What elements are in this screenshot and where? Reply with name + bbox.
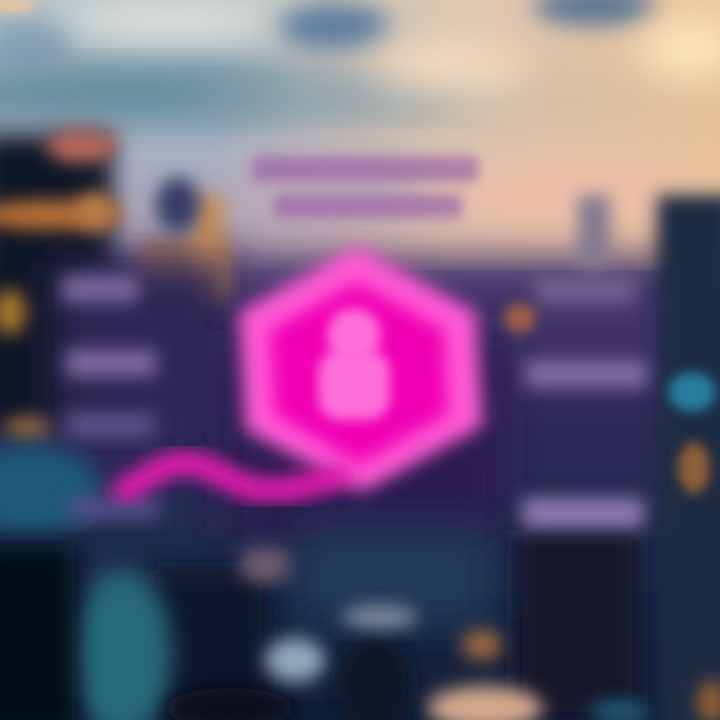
arrow: pink wavy tail: [124, 463, 340, 490]
building: teal foreground: [72, 570, 172, 720]
hexagon glow: [239, 246, 483, 492]
label bar: right 2: [525, 360, 647, 388]
label bar: left 3: [66, 413, 154, 437]
title line 1: [252, 156, 478, 182]
blurred label bars: [62, 276, 647, 528]
title (illegible purple text): [252, 156, 478, 218]
city ground: [0, 258, 720, 720]
building: lower dark blocks: [515, 530, 640, 720]
clouds: [0, 0, 720, 230]
label bar: left 4: [70, 497, 160, 519]
label bar: left 2: [66, 350, 156, 376]
building: distant spire: [578, 195, 610, 270]
building: foreground highlights: [265, 638, 325, 682]
lock body: [318, 350, 390, 420]
building: left dark tower: [0, 135, 112, 435]
side accents: [504, 303, 716, 494]
sky background: [0, 0, 720, 310]
label bar: left 1: [62, 276, 138, 302]
building: amber tower: [140, 240, 230, 300]
building: left purple block: [55, 260, 230, 460]
label bar: right 1: [535, 276, 635, 304]
accent: orange window: [504, 303, 536, 333]
accent: amber window: [678, 442, 710, 494]
hexagon inner: [270, 282, 448, 464]
building: hex backdrop: [225, 330, 505, 540]
lock shackle: [327, 308, 381, 362]
label bar: right 3: [522, 498, 644, 528]
icon: pink hexagon with lock: [239, 246, 483, 492]
accent: cyan window: [668, 372, 716, 412]
title line 2: [274, 194, 462, 218]
building: right dark tower: [657, 195, 720, 720]
